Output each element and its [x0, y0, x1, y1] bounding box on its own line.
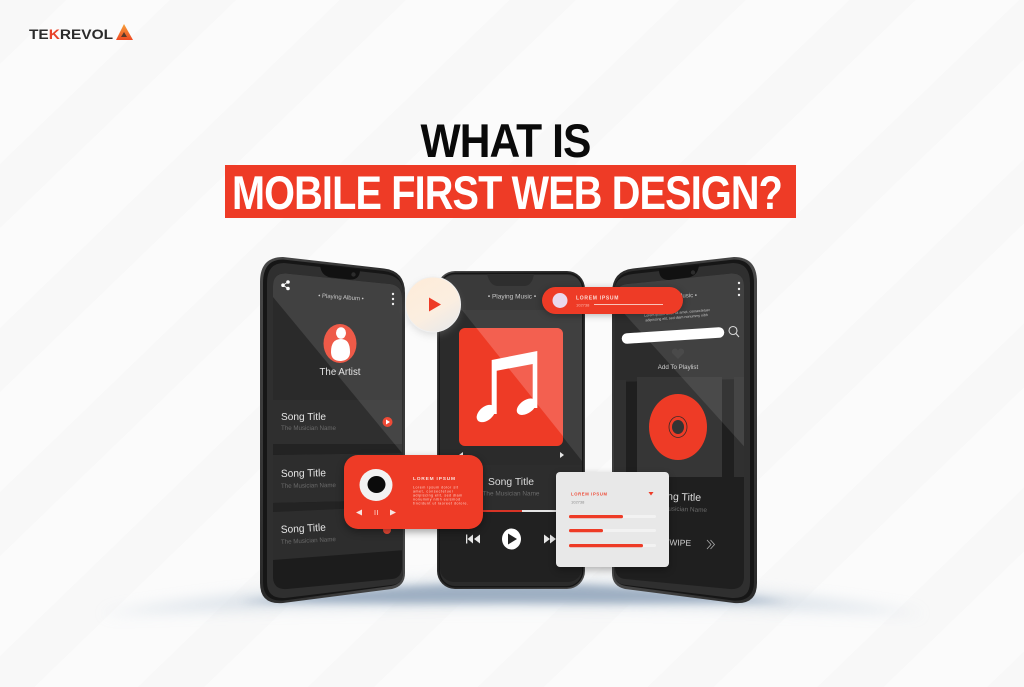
screen — [270, 270, 405, 595]
floating stats card: 102738 — [571, 500, 585, 504]
floating play button — [406, 277, 460, 335]
song row 1 — [281, 411, 392, 432]
bar 1 — [569, 515, 656, 518]
description text: Lorem ipsum dolor sit amet, consectetuer — [644, 308, 711, 318]
notch — [320, 265, 360, 280]
song row 3: The Musician Name — [281, 536, 336, 546]
song row 3: Song Title — [281, 522, 326, 536]
search bar — [627, 332, 719, 338]
heading band: MOBILE FIRST WEB DESIGN? — [232, 166, 782, 219]
player controls — [356, 510, 396, 516]
song row 3 — [281, 522, 391, 546]
phone: right playlist — [612, 257, 757, 603]
card body text: tincidunt ut laoreet dolore. — [413, 502, 468, 506]
notch — [659, 265, 699, 280]
screen — [440, 275, 582, 583]
swipe chevrons — [707, 540, 714, 549]
logo — [29, 24, 133, 42]
song title: Song Title — [488, 476, 534, 488]
music note — [473, 351, 539, 426]
floating red pill: 102738 — [576, 302, 590, 308]
musician name: The Musician Name — [482, 490, 540, 498]
phone body — [260, 257, 405, 603]
card body text: Lorem ipsum dolor sit — [413, 486, 458, 490]
share icon — [282, 281, 289, 290]
description text: adipiscing elit, sed diam nonummy nibh — [645, 313, 708, 322]
song row 2: Song Title — [281, 467, 326, 480]
phone body — [437, 271, 585, 589]
card body text: amet, consectetuer — [413, 490, 454, 494]
song title: Song Title — [654, 490, 701, 504]
playing music label: • Playing Music • — [652, 293, 697, 301]
logo triangle — [116, 24, 133, 40]
floating red player card — [344, 455, 483, 532]
bar 2 — [569, 529, 656, 532]
playing album label: • Playing Album • — [318, 293, 364, 303]
menu dots — [738, 282, 740, 296]
title — [225, 114, 796, 219]
card heading: LOREM IPSUM — [413, 476, 455, 482]
album art — [459, 328, 563, 446]
logo wordmark: TEKREVOL — [29, 27, 113, 42]
knob — [360, 469, 392, 501]
card body text: adipiscing elit, sed diam — [413, 494, 462, 498]
play button — [502, 528, 521, 550]
phone body — [612, 257, 757, 603]
song row 1: Song Title — [281, 411, 326, 423]
floating red pill: LOREM IPSUM — [576, 296, 619, 302]
progress bar — [480, 510, 562, 512]
card body text — [413, 486, 468, 506]
floating stats card: LOREM IPSUM — [571, 492, 608, 496]
heading line 1: WHAT IS — [420, 114, 590, 167]
artist avatar — [324, 324, 356, 363]
heart icon — [672, 348, 684, 359]
phone: center player — [437, 271, 585, 589]
description text — [644, 308, 711, 322]
swipe label: SWIPE — [664, 537, 692, 548]
notch — [487, 274, 534, 286]
rewind button — [466, 534, 480, 544]
floating stats card — [556, 472, 669, 570]
phone: left album — [260, 257, 405, 603]
song row 2 — [281, 467, 336, 490]
card body text: nonummy nibh euismod — [413, 498, 460, 502]
artist name: The Artist — [320, 366, 361, 378]
add to playlist: Add To Playlist — [658, 364, 699, 371]
search icon — [729, 326, 739, 337]
song row 1: The Musician Name — [281, 425, 336, 432]
bar 3 — [569, 544, 656, 547]
ground shadow — [100, 578, 925, 614]
floating red pill — [542, 287, 683, 315]
menu dots — [392, 293, 394, 305]
song row 2: The Musician Name — [281, 482, 336, 490]
musician name: The Musician Name — [650, 505, 708, 514]
carousel arrows — [459, 452, 564, 458]
forward button — [544, 534, 556, 544]
screen — [612, 270, 750, 595]
disc — [649, 394, 707, 460]
playing music label: • Playing Music • — [488, 294, 537, 300]
